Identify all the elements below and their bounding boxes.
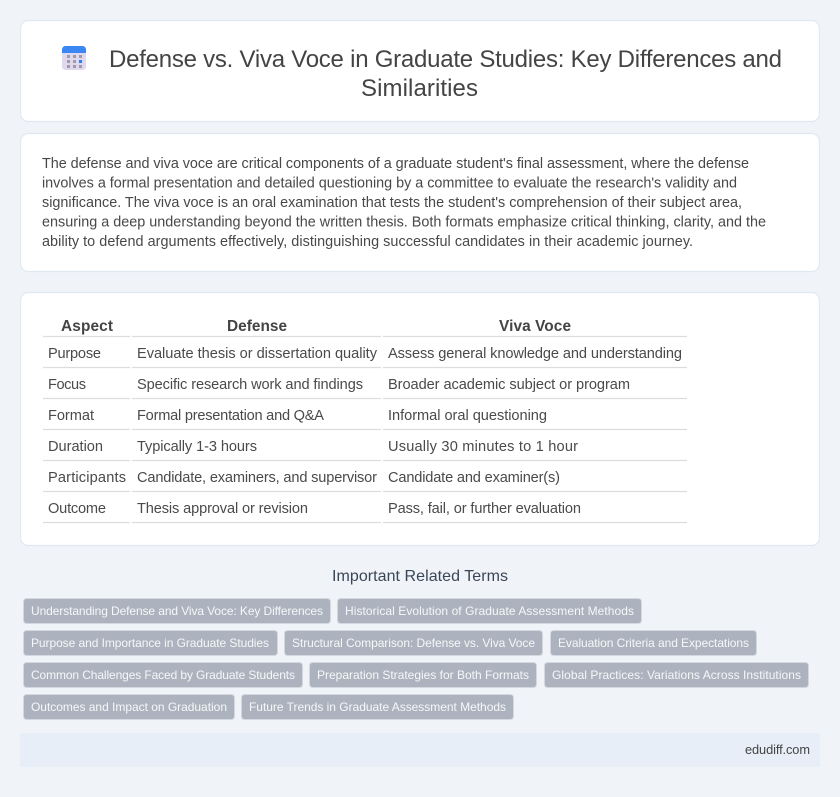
row: outcome: Outcome [48, 501, 106, 517]
row: duration: Typically 1-3 hours [137, 439, 257, 455]
row: focus [48, 377, 630, 393]
panel: header [20, 20, 820, 122]
row: outcome: Pass, fail, or further evaluation [388, 501, 581, 517]
row: duration: Usually 30 minutes to 1 hour [388, 439, 578, 455]
tag [24, 662, 302, 688]
row: outcome [48, 501, 581, 517]
tag [310, 662, 536, 688]
text block: summary: significance. The viva voce is an oral examination that tests the student's comprehension of their subject area, [42, 195, 742, 211]
tag [24, 630, 278, 656]
tag: Global Practices: Variations Across Institutions [552, 668, 801, 682]
text block: summary: involves a formal presentation and detailed questioning by a committee to evaluate the research's validity and [42, 176, 737, 192]
row: focus: Specific research work and findings [137, 377, 363, 393]
tag: Common Challenges Faced by Graduate Students [31, 668, 295, 682]
tag [24, 598, 330, 624]
row: format: Informal oral questioning [388, 408, 547, 424]
tag: Purpose and Importance in Graduate Studies [31, 636, 269, 650]
tag [284, 630, 542, 656]
row: purpose: Evaluate thesis or dissertation quality [137, 346, 378, 362]
tag: Historical Evolution of Graduate Assessment Methods [345, 604, 634, 618]
row: duration [48, 439, 578, 455]
text block: summary: ensuring a deep understanding beyond the written thesis. Both formats emphasize critical thinking, clarity, and the [42, 214, 766, 230]
row: duration: Duration [48, 439, 103, 455]
related terms tags [24, 598, 808, 720]
text block: summary: The defense and viva voce are critical components of a graduate student's final assessment, where the defense [42, 156, 749, 172]
row: participants: Candidate, examiners, and supervisor [137, 470, 377, 486]
table header: Aspect [61, 318, 113, 335]
tag [338, 598, 642, 624]
panel: comparison table [20, 292, 820, 546]
table header: Viva Voce [499, 318, 571, 335]
row: purpose [48, 346, 682, 362]
row: participants: Participants [48, 470, 126, 486]
icon: calendar [62, 46, 86, 70]
heading: related terms: Important Related Terms [332, 568, 508, 585]
tag: Evaluation Criteria and Expectations [558, 636, 749, 650]
row: purpose: Assess general knowledge and understanding [388, 346, 682, 362]
title: Similarities [361, 75, 478, 102]
table header [61, 318, 571, 335]
row: participants: Candidate and examiner(s) [388, 470, 560, 486]
text block: summary: ability to defend arguments effectively, distinguishing successful candidates in their academic journey. [42, 234, 693, 250]
row: format: Format [48, 408, 94, 424]
panel: summary paragraph [20, 134, 820, 272]
row: purpose: Purpose [48, 346, 101, 362]
tag: Understanding Defense and Viva Voce: Key Differences [31, 604, 323, 618]
row: participants [48, 470, 560, 486]
footer source: edudiff.com [745, 742, 810, 757]
title: Defense vs. Viva Voce in Graduate Studies: Key Differences and [109, 46, 782, 73]
tag [550, 630, 756, 656]
tag [544, 662, 808, 688]
table header: Defense [227, 318, 287, 335]
text block: summary [42, 156, 766, 250]
tag: Outcomes and Impact on Graduation [31, 700, 227, 714]
row: outcome: Thesis approval or revision [137, 501, 308, 517]
title [109, 46, 782, 102]
footer [20, 733, 820, 767]
row: focus: Focus [48, 377, 86, 393]
row: format [48, 408, 547, 424]
tag [242, 694, 514, 720]
tag [24, 694, 234, 720]
tag: Preparation Strategies for Both Formats [317, 668, 529, 682]
tag: Structural Comparison: Defense vs. Viva Voce [292, 636, 535, 650]
row: focus: Broader academic subject or program [388, 377, 630, 393]
tag: Future Trends in Graduate Assessment Methods [249, 700, 506, 714]
row: format: Formal presentation and Q&A [137, 408, 324, 424]
